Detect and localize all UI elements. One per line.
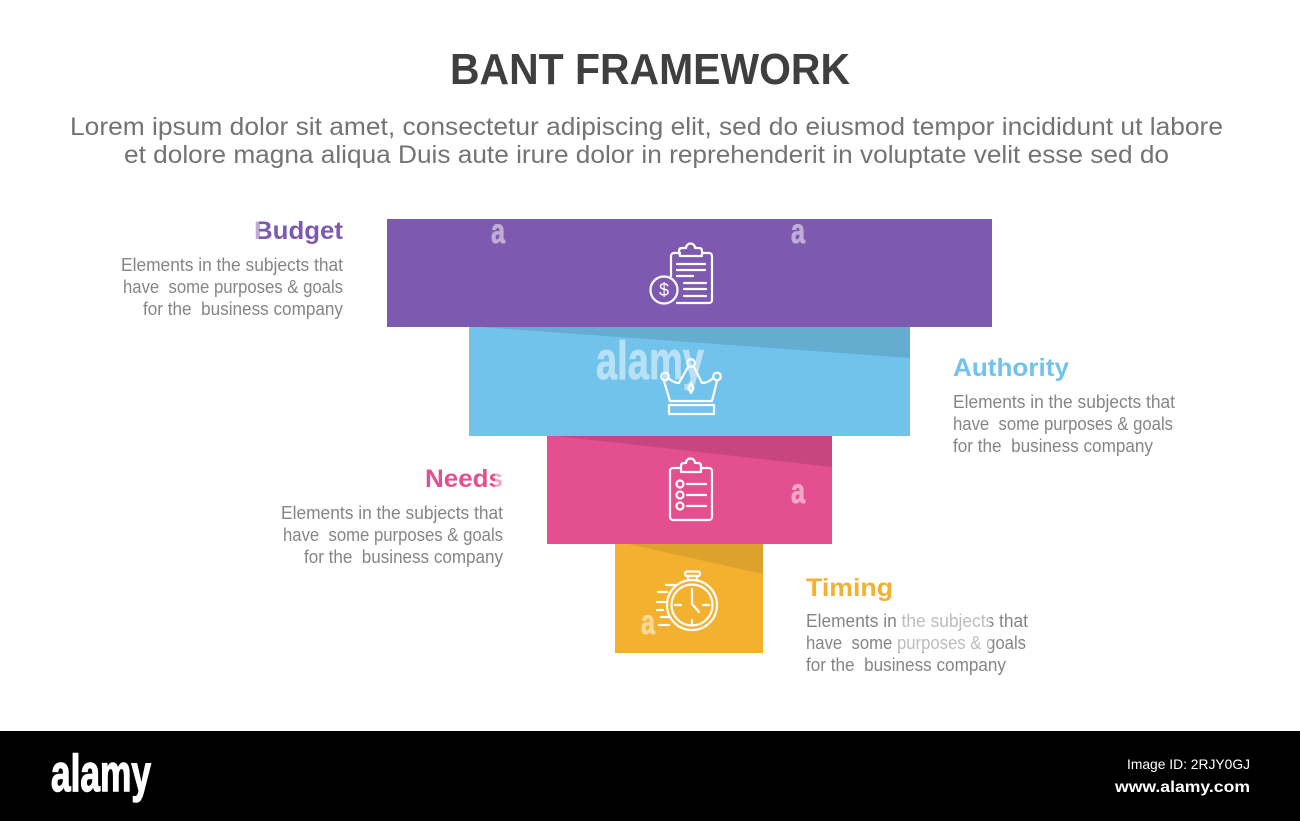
funnel bar: budget <box>387 219 992 327</box>
text block: budget: Budget <box>254 217 344 245</box>
text block: needs <box>281 465 503 567</box>
text block: authority: for the business company <box>953 436 1153 456</box>
watermark marks: a <box>641 603 655 642</box>
website: www.alamy.com <box>1114 779 1250 796</box>
icon: clipboard with dollar coin <box>650 244 712 304</box>
icon: clipboard with dollar coin: $ <box>659 280 669 300</box>
text block: needs: Elements in the subjects that <box>281 503 503 523</box>
watermark footer bar <box>0 731 1300 821</box>
funnel bar: timing <box>615 544 763 653</box>
text block: needs: for the business company <box>304 547 503 567</box>
text block: needs: Needs <box>425 465 503 493</box>
subtitle text: Lorem ipsum dolor sit amet, consectetur adipiscing elit, sed do eiusmod tempor incididunt ut labore <box>70 113 1223 141</box>
text block: authority: Elements in the subjects that <box>953 392 1175 412</box>
text block: timing: Elements in the subjects that <box>806 611 1028 631</box>
text block: authority: have some purposes & goals <box>953 414 1173 434</box>
watermark marks: a <box>791 472 805 511</box>
subtitle text <box>70 113 1223 169</box>
watermark marks <box>491 212 805 642</box>
text block: timing: have some purposes & goals <box>806 633 1026 653</box>
text block: budget <box>121 217 344 319</box>
watermark marks: alamy <box>596 331 704 391</box>
icon: checklist clipboard <box>670 459 712 520</box>
icon: stopwatch <box>657 572 717 630</box>
icon: crown <box>661 359 721 414</box>
image id: Image ID: 2RJY0GJ <box>1127 756 1250 772</box>
text block: needs: have some purposes & goals <box>283 525 503 545</box>
text block: budget: have some purposes & goals <box>123 277 343 297</box>
text block: authority <box>953 354 1175 456</box>
subtitle text: et dolore magna aliqua Duis aute irure dolor in reprehenderit in voluptate velit esse sed do <box>124 141 1169 169</box>
title: BANT FRAMEWORK <box>450 45 850 94</box>
funnel chart <box>387 219 992 653</box>
text block: budget: for the business company <box>143 299 343 319</box>
text block: timing: for the business company <box>806 655 1006 675</box>
text block: authority: Authority <box>953 354 1069 382</box>
footer logo: alamy <box>51 745 151 803</box>
text block: budget: Elements in the subjects that <box>121 255 343 275</box>
watermark fades over text <box>253 220 990 652</box>
watermark marks: a <box>491 212 505 251</box>
funnel bar: needs <box>547 436 832 544</box>
text block: timing: Timing <box>806 574 893 602</box>
funnel bar: authority <box>469 327 910 436</box>
watermark marks: a <box>791 212 805 251</box>
text block: timing <box>806 574 1028 675</box>
